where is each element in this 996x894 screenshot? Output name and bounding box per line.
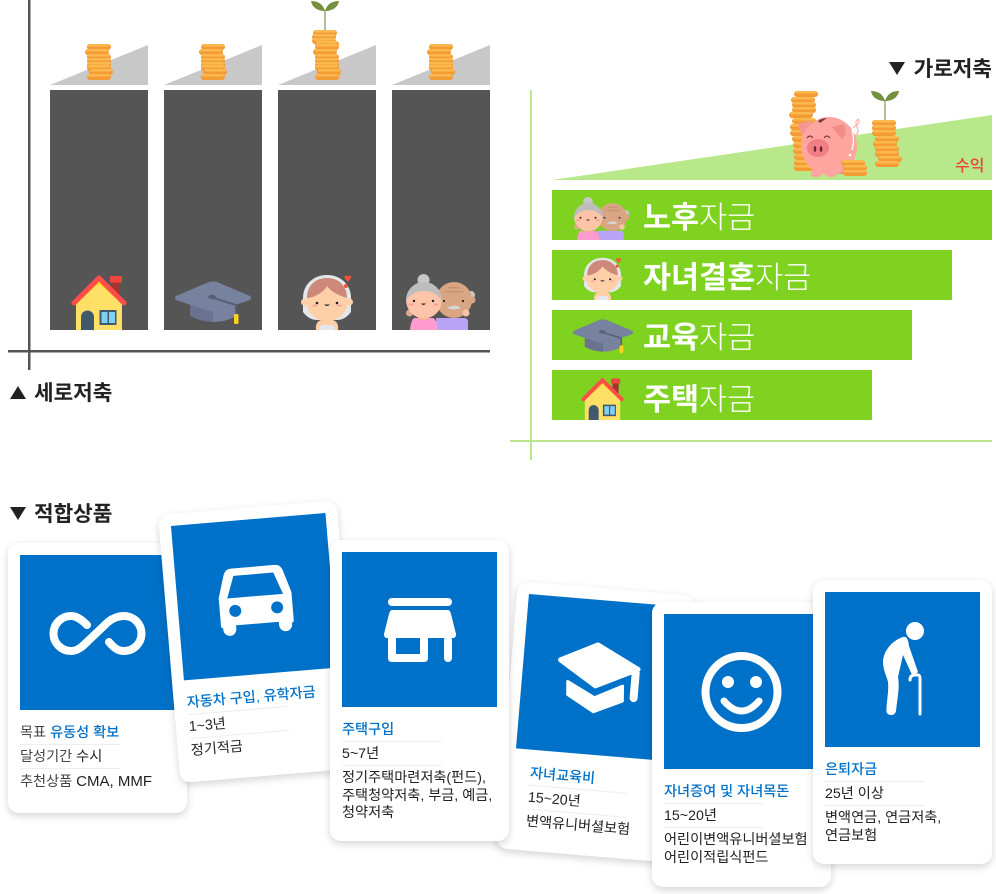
card text: 은퇴자금 [825,762,877,778]
card text [825,762,941,844]
heading: vertical savings: 세로저축 [34,381,112,405]
card text: 달성기간 수시 [20,749,102,765]
icon: elderly person with cane [825,592,980,747]
card text: 연금보험 [825,828,877,844]
bar: child marriage fund: 자녀결혼자금 [643,261,811,295]
icon: up triangle [10,386,26,399]
card text: 변액유니버셜보험 [525,814,631,838]
card text: 어린이변액유니버셜보험 [664,832,808,848]
card text [20,724,152,790]
heading: suitable products: 적합상품 [34,502,112,526]
card text [342,722,492,821]
card: child education [496,581,696,863]
bar: housing fund: 주택자금 [643,383,755,417]
card text: 자동차 구입, 유학자금 [186,684,316,711]
card text: 목표 유동성 확보 [20,725,119,741]
icon: infinity [20,555,175,710]
bar: retirement fund [552,190,992,240]
column: retirement [392,44,490,330]
icon: graduation cap [516,594,683,761]
card text: 1~3년 [188,716,227,735]
card: retirement [813,580,992,864]
card: child gift and savings [652,602,831,887]
card text: 25년 이상 [825,786,884,802]
card: housing purchase [330,540,509,841]
card text: 주택구입 [342,722,394,738]
card text: 주택청약저축, 부금, 예금, [342,788,492,804]
chart axes and return wedge [510,90,992,460]
card text: 5~7년 [342,746,379,762]
panel: horizontal savings chart [889,57,992,81]
bar: child marriage fund [552,250,952,300]
heading: horizontal savings: 가로저축 [914,57,992,81]
icon: down triangle [889,62,905,75]
icon: car [171,513,338,680]
card text: 15~20년 [527,790,581,810]
panel: vertical savings chart [8,0,490,405]
card text [525,766,631,838]
card text: 변액연금, 연금저축, [825,810,941,826]
bar: housing fund [552,370,872,420]
horizontal axis [8,350,490,352]
column: housing [50,44,148,330]
card text [186,684,316,759]
icon: suitable products triangle [10,507,26,520]
card text: 청약저축 [342,805,394,821]
column: education [164,44,262,330]
label: return: 수익 [955,157,984,175]
vertical axis [28,0,30,370]
card text: 정기주택마련저축(펀드), [342,770,486,786]
column: child marriage [278,1,376,330]
bar: education fund: 교육자금 [643,321,755,355]
card: car and study abroad [158,500,359,783]
icon: smile [664,614,819,769]
card text: 정기적금 [190,739,244,759]
icon: piggy bank and coins [789,91,902,177]
card text [664,784,808,866]
bar: retirement fund: 노후자금 [643,201,755,235]
card text: 15~20년 [664,808,717,824]
bar: education fund [552,310,912,360]
icon: store [342,552,497,707]
card text: 자녀증여 및 자녀목돈 [664,784,789,800]
card: liquidity [8,543,187,813]
card text: 자녀교육비 [529,766,596,787]
card text: 어린이적립식펀드 [664,850,768,866]
card text: 추천상품 CMA, MMF [20,773,152,790]
